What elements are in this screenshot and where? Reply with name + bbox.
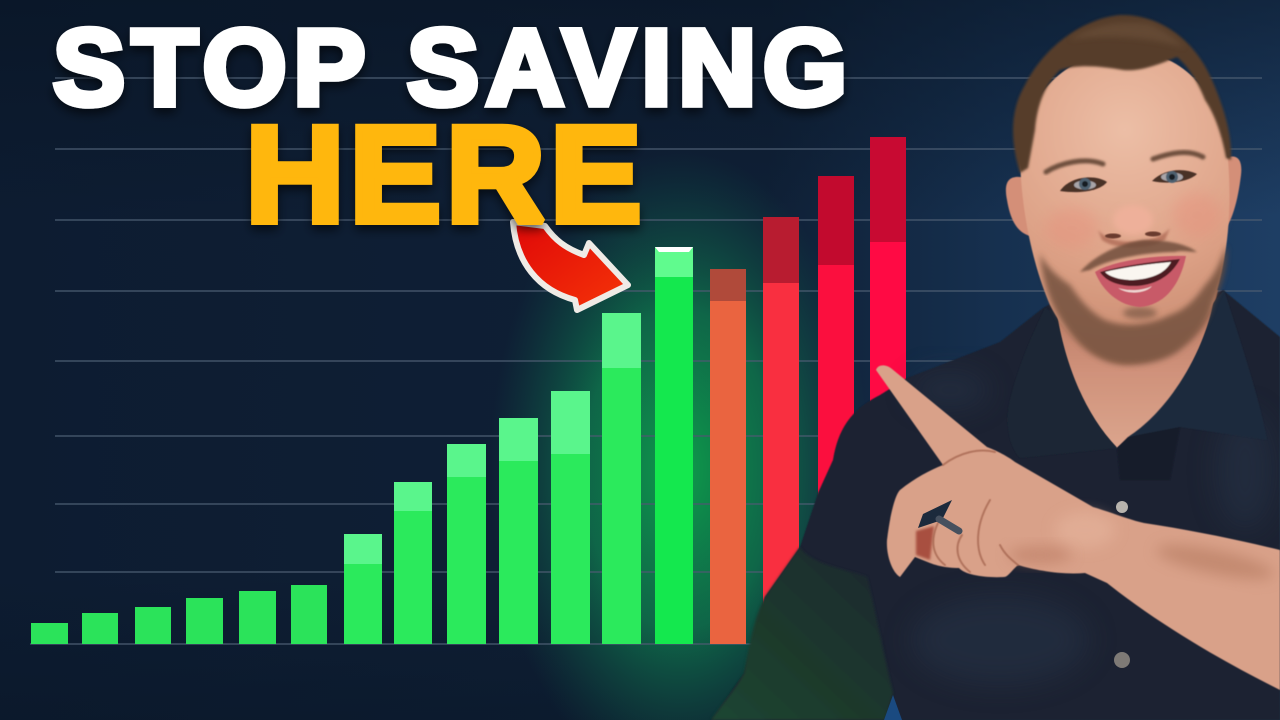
left sleeve (711, 547, 893, 720)
nose (1098, 228, 1170, 248)
bar chart (31, 137, 906, 644)
neck (1052, 290, 1218, 448)
cheeks and nose highlights (1046, 193, 1221, 248)
arrow (513, 222, 628, 310)
gap between fingers (918, 500, 952, 528)
hair highlight (1070, 23, 1185, 48)
collar (1008, 290, 1267, 480)
eyes (1060, 170, 1197, 192)
gap below sleeve (884, 695, 902, 720)
shirt (711, 290, 1280, 720)
finger creases (933, 451, 1018, 572)
ears (1006, 156, 1241, 236)
folded finger shadow (916, 526, 934, 560)
title line 1: STOP SAVING (53, 6, 847, 128)
highlighted peak green bar (655, 247, 693, 644)
hair (1013, 15, 1231, 173)
shirt fabric highlights (910, 370, 1275, 685)
orange bar (710, 269, 746, 644)
hand and forearm (876, 365, 1280, 690)
red bar 2 (818, 176, 854, 644)
title (53, 6, 847, 252)
growing green bars, light top segment (344, 313, 641, 564)
moustache (1080, 240, 1197, 272)
mouth (1095, 256, 1186, 307)
title line 2: HERE (246, 98, 642, 252)
red bar 1 (763, 217, 799, 644)
face (1020, 50, 1229, 365)
eyebrows (1046, 153, 1203, 172)
shirt snap button lower (1114, 652, 1130, 668)
beard (1040, 245, 1227, 365)
ring (939, 519, 959, 531)
growing green bars, lower segment (344, 368, 641, 644)
soul patch (1123, 307, 1157, 319)
presenter (711, 15, 1280, 720)
hand shading (1008, 512, 1276, 586)
red bar 3 (870, 137, 906, 644)
shirt snap button upper (1116, 501, 1128, 513)
small green bars (31, 585, 327, 644)
